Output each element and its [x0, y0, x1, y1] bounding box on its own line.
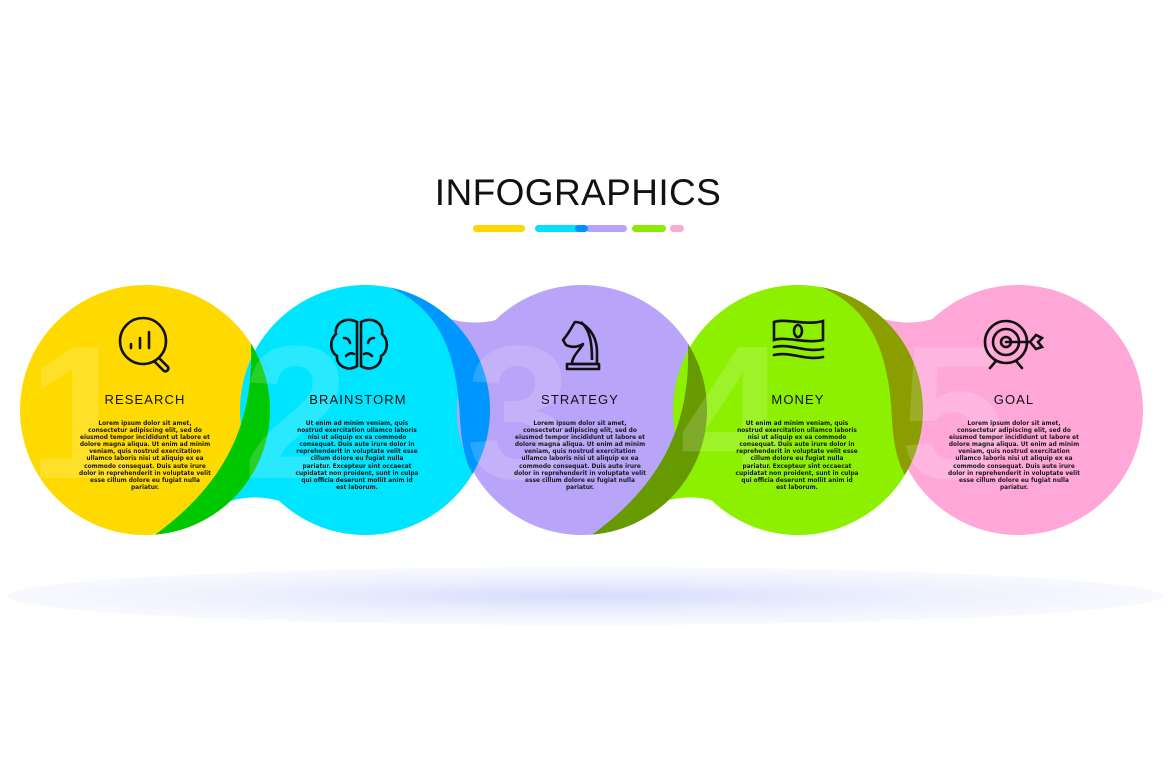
text block 3: consectetur adipiscing elit, sed do	[523, 426, 637, 434]
text block 1: consectetur adipiscing elit, sed do	[88, 426, 202, 434]
text block 2: cupidatat non proident, sunt in culpa	[296, 469, 418, 477]
icon: money	[774, 321, 823, 358]
overlap 1-2	[154, 343, 270, 535]
big numbers: 4	[680, 307, 786, 519]
icon: brain	[331, 320, 387, 368]
overlap 4-5	[821, 287, 923, 475]
text block 4: pariatur. Excepteur sint occaecat	[743, 462, 851, 470]
text block 5	[948, 419, 1080, 491]
headings: BRAINSTORM	[309, 392, 407, 407]
circle 4	[673, 285, 923, 535]
text block 1: Lorem ipsum dolor sit amet,	[98, 419, 192, 427]
text block 4: nostrud exercitation ullamco laboris	[737, 426, 857, 434]
headings: RESEARCH	[104, 392, 186, 407]
big numbers: 1	[28, 307, 134, 519]
text block 2: Ut enim ad minim veniam, quis	[306, 419, 408, 427]
text block 3: ullamco laboris nisi ut aliquip ex ea	[521, 454, 639, 462]
text block 3: eiusmod tempor incididunt ut labore et	[515, 433, 645, 441]
text block 1: commodo consequat. Duis aute irure	[84, 462, 206, 470]
headings: MONEY	[771, 392, 825, 407]
text block 1: pariatur.	[131, 483, 159, 491]
text block 2: nostrud exercitation ullamco laboris	[297, 426, 417, 434]
text block 5: consectetur adipiscing elit, sed do	[957, 426, 1071, 434]
text block 3: Lorem ipsum dolor sit amet,	[533, 419, 627, 427]
text block 4: Ut enim ad minim veniam, quis	[746, 419, 848, 427]
circles diagram	[20, 285, 1143, 535]
circle 1	[20, 285, 270, 535]
text block 1: dolor in reprehenderit in voluptate velit	[79, 469, 211, 477]
text block 4: reprehenderit in voluptate velit esse	[736, 447, 858, 455]
title: INFOGRAPHICS	[435, 172, 721, 213]
text block 5: Lorem ipsum dolor sit amet,	[967, 419, 1061, 427]
text block 1: ullamco laboris nisi ut aliquip ex ea	[86, 454, 204, 462]
circle 3	[457, 285, 707, 535]
text block 1: eiusmod tempor incididunt ut labore et	[80, 433, 210, 441]
text block 2: cillum dolore eu fugiat nulla	[310, 454, 404, 462]
text block 3: esse cillum dolore eu fugiat nulla	[525, 476, 635, 484]
text block 4: est laborum.	[776, 483, 818, 491]
text block 5: ullamco laboris nisi ut aliquip ex ea	[955, 454, 1073, 462]
icon: chess knight	[563, 322, 599, 369]
big numbers: 2	[243, 307, 349, 519]
headings: STRATEGY	[541, 392, 619, 407]
text block 5: pariatur.	[1000, 483, 1028, 491]
big numbers	[28, 307, 1006, 519]
circle 5	[893, 285, 1143, 535]
overlap 2-3	[389, 287, 490, 474]
text block 3: commodo consequat. Duis aute irure	[519, 462, 641, 470]
text block 5: dolore magna aliqua. Ut enim ad minim	[949, 440, 1079, 448]
text block 2: consequat. Duis aute irure dolor in	[299, 440, 415, 448]
text block 5: eiusmod tempor incididunt ut labore et	[949, 433, 1079, 441]
text block 5: commodo consequat. Duis aute irure	[953, 462, 1075, 470]
text block 1: veniam, quis nostrud exercitation	[89, 447, 201, 455]
necks	[205, 300, 958, 520]
title underline bars	[473, 225, 684, 232]
headings: GOAL	[994, 392, 1034, 407]
text block 4: cillum dolore eu fugiat nulla	[750, 454, 844, 462]
text block 4: qui officia deserunt mollit anim id	[741, 476, 853, 484]
text block 1: esse cillum dolore eu fugiat nulla	[90, 476, 200, 484]
headings	[104, 392, 1034, 407]
text block 4: consequat. Duis aute irure dolor in	[739, 440, 855, 448]
text block 3: pariatur.	[566, 483, 594, 491]
text block 3: dolore magna aliqua. Ut enim ad minim	[515, 440, 645, 448]
text block 5: dolor in reprehenderit in voluptate velit	[948, 469, 1080, 477]
circle 2	[240, 285, 490, 535]
text block 2: nisi ut aliquip ex ea commodo	[308, 433, 406, 441]
text block 2: qui officia deserunt mollit anim id	[301, 476, 413, 484]
text block 1	[79, 419, 211, 491]
text block 5: veniam, quis nostrud exercitation	[958, 447, 1070, 455]
big numbers: 5	[900, 307, 1006, 519]
text block 4: nisi ut aliquip ex ea commodo	[748, 433, 846, 441]
text block 3	[514, 419, 646, 491]
text block 5: esse cillum dolore eu fugiat nulla	[959, 476, 1069, 484]
text block 2: est laborum.	[336, 483, 378, 491]
big numbers: 3	[466, 307, 572, 519]
text block 2: reprehenderit in voluptate velit esse	[296, 447, 418, 455]
overlap 3-4	[592, 343, 707, 535]
text block 2: pariatur. Excepteur sint occaecat	[303, 462, 411, 470]
text block 3: dolor in reprehenderit in voluptate velit	[514, 469, 646, 477]
text block 2	[296, 419, 418, 491]
text block 4: cupidatat non proident, sunt in culpa	[736, 469, 858, 477]
text block 1: dolore magna aliqua. Ut enim ad minim	[80, 440, 210, 448]
icon: magnifier chart	[120, 318, 168, 371]
text block 4	[736, 419, 858, 491]
text block 3: veniam, quis nostrud exercitation	[524, 447, 636, 455]
icon: target	[985, 321, 1042, 368]
